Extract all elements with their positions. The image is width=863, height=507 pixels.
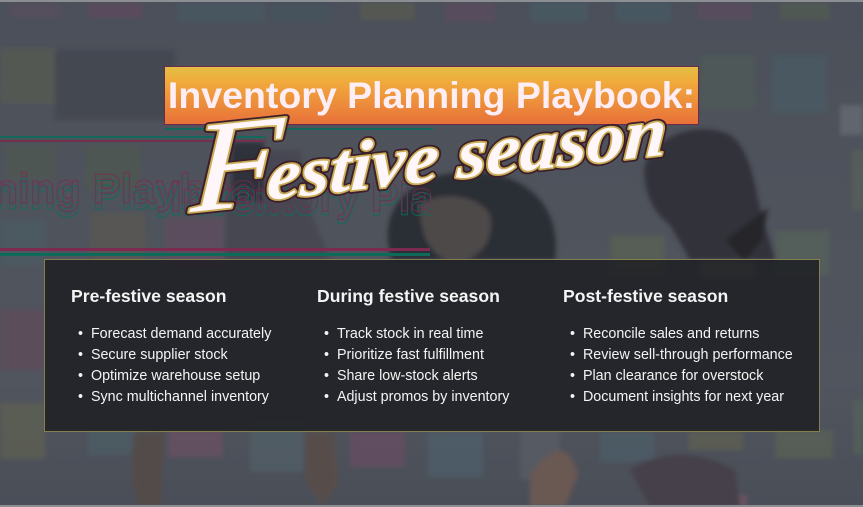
column: during festive	[317, 286, 510, 405]
column: post-festive	[563, 286, 793, 405]
list	[324, 326, 510, 405]
list: • Optimize warehouse setup	[78, 368, 260, 384]
heading: Pre-festive season	[71, 286, 226, 306]
list	[78, 326, 272, 405]
list: • Prioritize fast fulfillment	[324, 347, 484, 363]
list: • Adjust promos by inventory	[324, 389, 509, 405]
script subtitle: Festive season: F	[188, 87, 287, 240]
list	[570, 326, 793, 405]
heading: Post-festive season	[563, 286, 728, 306]
list: • Secure supplier stock	[78, 347, 228, 363]
script subtitle: Festive season: estive season	[265, 92, 669, 216]
panel: seasons	[44, 259, 820, 432]
list: • Reconcile sales and returns	[570, 326, 759, 342]
ghost glitch text artefact: Inventory Planning Playbook:	[170, 173, 760, 220]
list: • Share low-stock alerts	[324, 368, 478, 384]
list: • Sync multichannel inventory	[78, 389, 269, 405]
title text: Inventory Planning Playbook:	[168, 74, 695, 116]
title banner	[165, 67, 698, 124]
list: • Track stock in real time	[324, 326, 483, 342]
list: • Review sell-through performance	[570, 347, 793, 363]
list: • Document insights for next year	[570, 389, 784, 405]
ghost glitch text artefact: Inventory Planning Playbook:	[170, 177, 760, 224]
list: • Plan clearance for overstock	[570, 368, 763, 384]
ghost glitch text artefact	[0, 128, 433, 256]
column: pre-festive	[71, 286, 272, 405]
heading: During festive season	[317, 286, 500, 306]
list: • Forecast demand accurately	[78, 326, 271, 342]
script subtitle: Festive season: estive season	[265, 92, 669, 216]
script subtitle: Festive season: F	[188, 87, 287, 240]
